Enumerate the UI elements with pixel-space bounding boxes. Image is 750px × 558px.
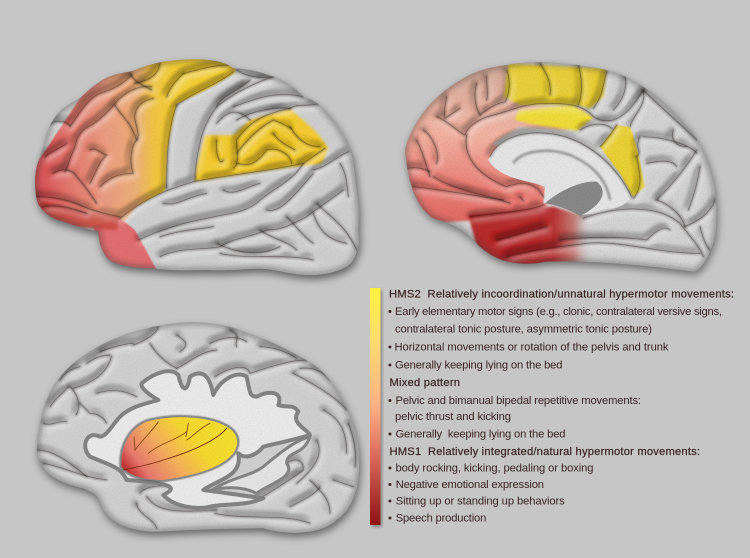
thalamic line <box>513 151 610 200</box>
temporal pole red <box>93 218 157 270</box>
mixed pattern list: Pelvic and bimanual bipedal repetitive movements: <box>396 395 641 407</box>
HMS2 list <box>388 306 722 372</box>
parietal yellow patch <box>195 108 328 182</box>
mixed pattern list: • <box>388 429 392 441</box>
brain: lateral view with opercula removed showing insula <box>33 321 366 542</box>
mixed pattern heading: Mixed pattern <box>390 377 460 389</box>
exposed white matter <box>85 371 310 508</box>
mixed pattern list: pelvic thrust and kicking <box>395 411 511 423</box>
HMS2 list: • <box>388 342 392 354</box>
HMS1 list: • <box>388 496 392 508</box>
HMS1 list: • <box>388 513 392 525</box>
outline shading <box>405 62 717 272</box>
HMS2 list: • <box>388 306 392 318</box>
HMS2 list: contralateral tonic posture, asymmetric tonic posture) <box>395 324 652 336</box>
mixed pattern list: • <box>388 395 392 407</box>
sulci lines <box>407 63 715 257</box>
outline shading <box>37 322 359 533</box>
HMS1 list: Negative emotional expression <box>396 479 544 491</box>
HMS1 list: body rocking, kicking, pedaling or boxing <box>396 463 594 475</box>
HMS2 list: Horizontal movements or rotation of the pelvis and trunk <box>394 342 669 354</box>
HMS1 list: Speech production <box>396 513 486 525</box>
brain: lateral view with frontal and parietal colouring <box>20 40 370 280</box>
legend <box>370 288 734 527</box>
ventricle dark area <box>545 181 603 216</box>
mixed pattern list: Generally keeping lying on the bed <box>396 429 566 441</box>
embossed gyri lighting <box>37 327 356 528</box>
outline shading <box>35 59 359 275</box>
sulci shadow <box>37 327 356 528</box>
orbital red shading <box>33 197 120 230</box>
HMS2 list: Early elementary motor signs (e.g., clonic, contralateral versive signs, <box>395 306 722 318</box>
sulci shadow <box>37 63 357 260</box>
sulci lines <box>37 63 357 260</box>
HMS2 heading: HMS2 Relatively incoordination/unnatural hypermotor movements: <box>389 288 734 300</box>
mixed pattern list <box>388 395 641 441</box>
HMS1 list: Sitting up or standing up behaviors <box>396 496 565 508</box>
HMS1 heading: HMS1 Relatively integrated/natural hypermotor movements: <box>390 446 700 458</box>
HMS1 list: • <box>388 463 392 475</box>
corpus callosum <box>488 134 631 215</box>
HMS2 list: • <box>388 360 392 372</box>
HMS1 list: • <box>388 479 392 491</box>
medial yellow upper gyrus <box>504 63 607 108</box>
posterior yellow patch <box>600 125 645 197</box>
deep red orbital region <box>468 207 593 267</box>
lower posterior white matter <box>212 437 310 493</box>
brain: medial view with cingulate and orbitofrontal colouring <box>402 60 723 280</box>
HMS2 list: Generally keeping lying on the bed <box>395 360 562 372</box>
sulci shadow <box>407 63 715 257</box>
colour scale bar <box>370 288 382 527</box>
frontal lobe colour gradient <box>30 53 237 227</box>
sulci lines <box>37 327 356 528</box>
insula <box>122 417 237 480</box>
HMS1 list <box>388 463 594 525</box>
cingulate yellow <box>515 105 593 131</box>
embossed gyri lighting <box>37 63 357 260</box>
medial frontal pink gradient <box>397 60 587 223</box>
embossed gyri lighting <box>407 63 715 257</box>
